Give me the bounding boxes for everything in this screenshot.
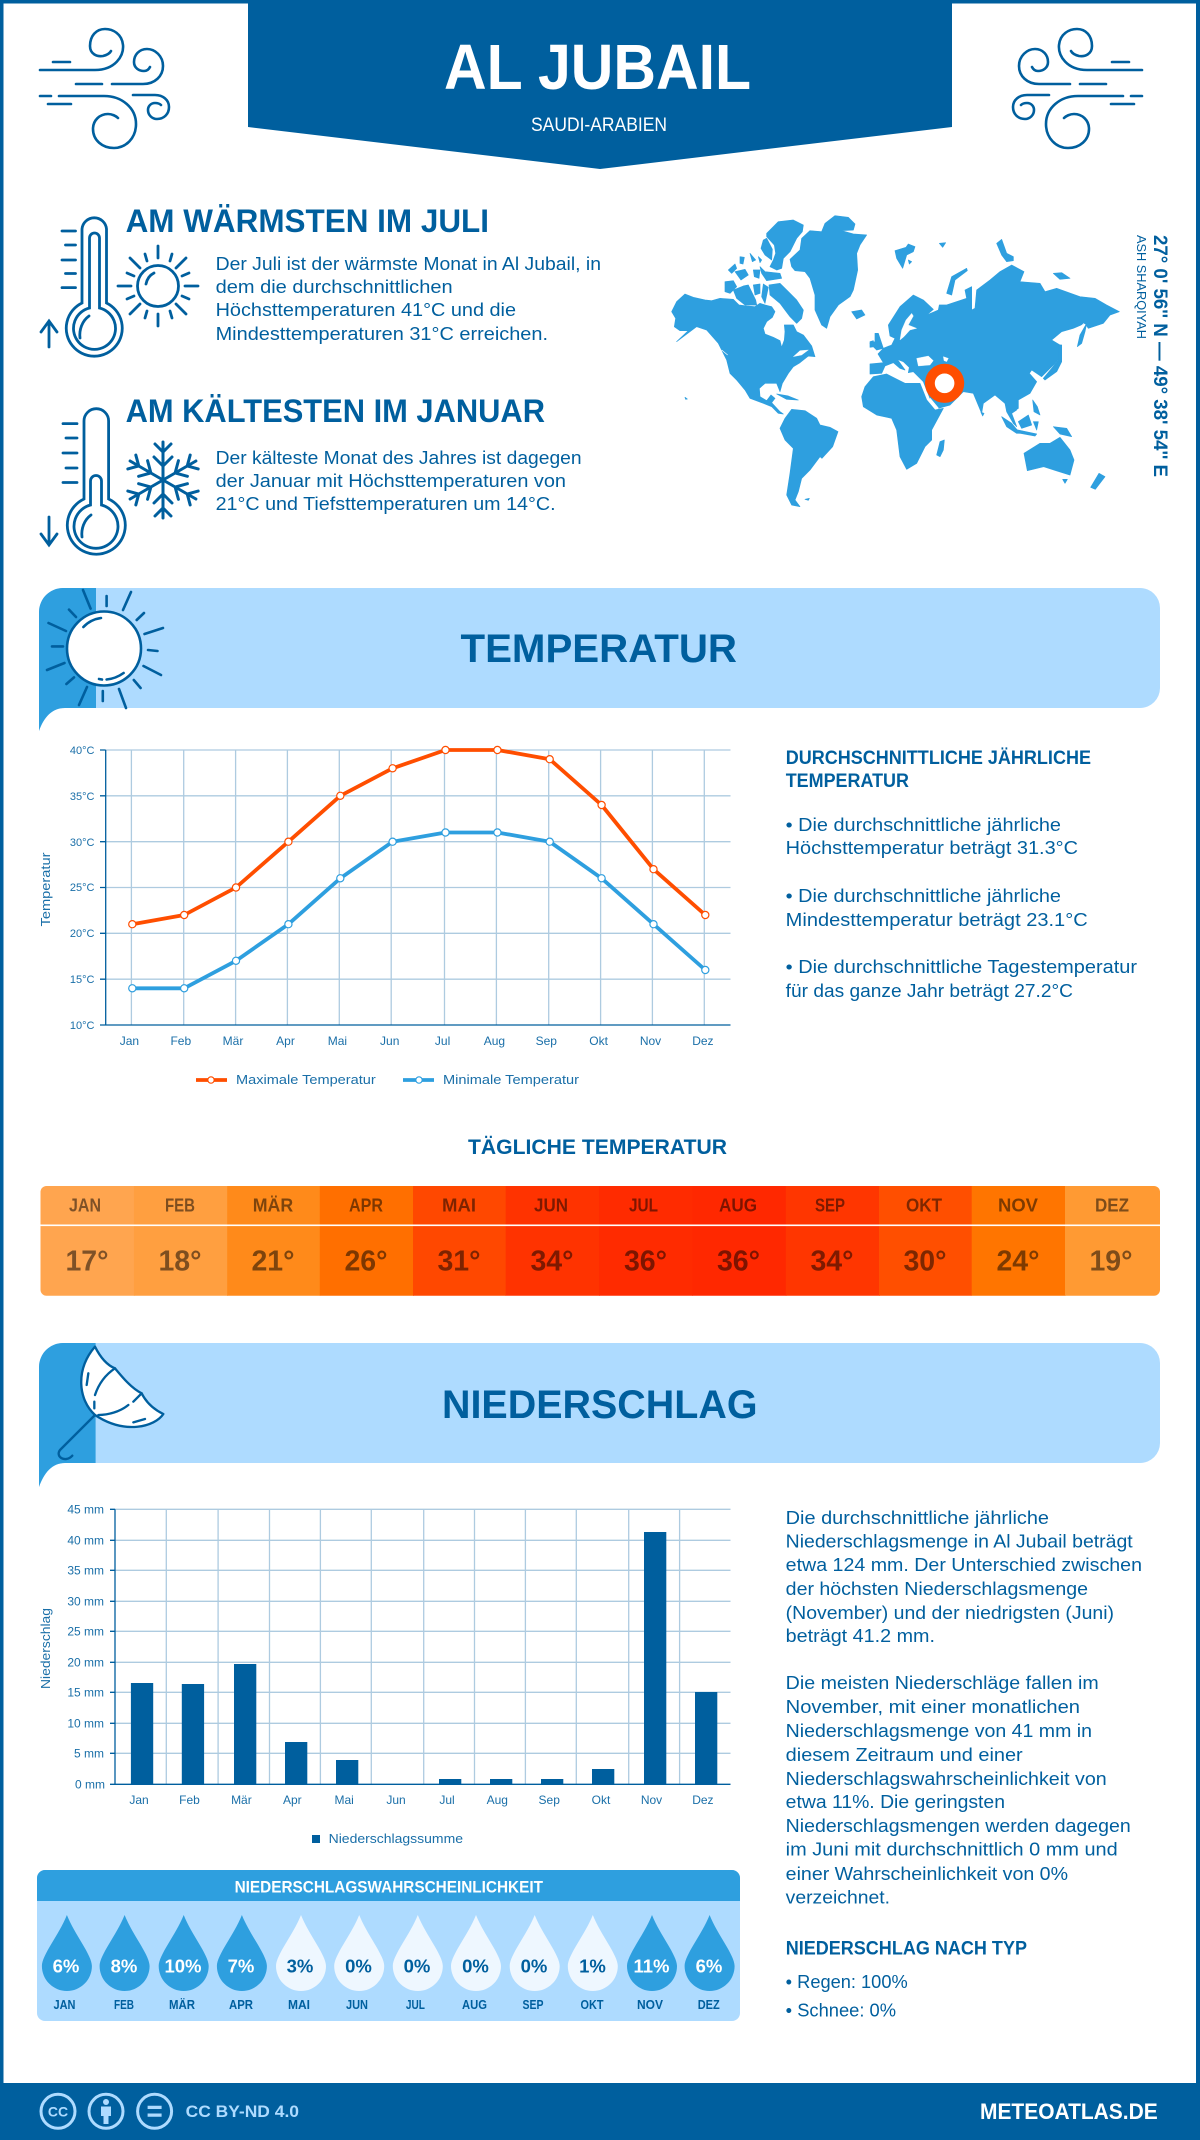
daily values: 26° <box>344 1246 388 1278</box>
text: coldest month: Der kälteste Monat des Jahres ist dagegen <box>216 448 582 468</box>
license text: CC BY-ND 4.0 <box>186 2102 299 2121</box>
daily values: 19° <box>1089 1246 1133 1278</box>
text block: precipitation description: der höchsten Niederschlagsmenge <box>786 1579 1088 1599</box>
legend <box>196 1073 579 1087</box>
world map with location marker <box>672 216 1119 507</box>
region name: ASH SHARQIYAH <box>1134 235 1149 339</box>
bullets: annual temperature: Höchsttemperatur beträgt 31.3°C <box>786 838 1078 858</box>
y axis labels: 40 mm <box>67 1534 104 1548</box>
y axis labels: 5 mm <box>74 1746 104 1760</box>
x axis labels: Feb <box>179 1793 200 1807</box>
text block: precipitation description: Die meisten Niederschläge fallen im <box>786 1673 1099 1693</box>
line chart: temperature <box>39 745 730 1087</box>
probability values: 0% <box>521 1956 547 1977</box>
x axis labels: Sep <box>536 1034 557 1048</box>
legend: Maximale Temperatur <box>236 1073 376 1087</box>
y axis title: Temperatur <box>39 852 53 926</box>
daily values <box>65 1246 1133 1278</box>
daily values: 21° <box>251 1246 295 1278</box>
bullets: annual temperature: • Die durchschnittliche jährliche <box>786 886 1061 906</box>
month labels: SEP <box>815 1196 845 1216</box>
icon: wind right <box>1013 29 1142 148</box>
x axis labels: Apr <box>276 1034 295 1048</box>
bullets: precipitation by type <box>786 1972 908 2021</box>
probability values: 6% <box>53 1956 79 1977</box>
month labels: JUN <box>346 1997 368 2012</box>
probability values: 8% <box>111 1956 137 1977</box>
daily values: 24° <box>996 1246 1040 1278</box>
heading: daily temperature: TÄGLICHE TEMPERATUR <box>468 1136 727 1159</box>
text: warmest month: dem die durchschnittlichen <box>216 277 453 297</box>
daily values: 34° <box>530 1246 574 1278</box>
daily values: 36° <box>624 1246 667 1278</box>
series: minimum temperature <box>129 829 709 992</box>
heading: annual temperature: DURCHSCHNITTLICHE JÄHRLICHE <box>786 748 1091 769</box>
x axis labels: Sep <box>539 1793 560 1807</box>
x axis labels: Nov <box>640 1034 661 1048</box>
month labels: JAN <box>54 1997 76 2012</box>
x axis labels: Nov <box>641 1793 662 1807</box>
x axis labels: Aug <box>487 1793 508 1807</box>
daily values: 17° <box>65 1246 109 1278</box>
heading: coldest month: AM KÄLTESTEN IM JANUAR <box>126 393 545 429</box>
x axis labels: Jun <box>386 1793 406 1807</box>
x axis labels <box>129 1793 714 1807</box>
daily values: 18° <box>158 1246 202 1278</box>
x axis labels: Apr <box>283 1793 302 1807</box>
month labels: MAI <box>288 1997 310 2012</box>
text block: precipitation description: Niederschlagsmenge in Al Jubail beträgt <box>786 1532 1133 1552</box>
daily values: 36° <box>717 1246 760 1278</box>
y axis labels: 30°C <box>70 837 95 849</box>
series: maximum temperature <box>129 746 709 928</box>
text block: precipitation description: Die durchschnittliche jährliche <box>786 1508 1049 1528</box>
y axis labels: 10 mm <box>67 1716 104 1730</box>
text block: precipitation description: November, mit einer monatlichen <box>786 1697 1080 1717</box>
location marker <box>930 369 959 398</box>
x axis labels: Jul <box>435 1034 450 1048</box>
x axis labels: Mai <box>328 1034 347 1048</box>
bullets: annual temperature: • Die durchschnittliche Tagestemperatur <box>786 957 1137 977</box>
text block: precipitation description: diesem Zeitraum und einer <box>786 1745 1023 1765</box>
month labels: AUG <box>462 1997 487 2012</box>
probability values: 6% <box>696 1956 722 1977</box>
month labels: JUL <box>629 1196 658 1216</box>
text block: precipitation description: beträgt 41.2 mm. <box>786 1626 935 1646</box>
y axis labels <box>70 745 95 1032</box>
probability values <box>53 1956 722 1977</box>
heading: warmest month: AM WÄRMSTEN IM JULI <box>126 203 489 239</box>
x axis labels: Jan <box>120 1034 139 1048</box>
icon: cold thermometer <box>41 409 125 554</box>
x axis labels: Jul <box>439 1793 455 1807</box>
probability values: 10% <box>164 1956 202 1977</box>
x axis labels: Okt <box>589 1034 609 1048</box>
site name: METEOATLAS.DE <box>980 2099 1158 2124</box>
legend: Niederschlagssumme <box>329 1832 463 1846</box>
x axis labels: Dez <box>692 1034 714 1048</box>
bullets: annual temperature <box>786 815 1137 1001</box>
month labels: JUN <box>534 1196 568 1216</box>
icon: wind left <box>40 29 169 148</box>
probability values: 7% <box>228 1956 254 1977</box>
text: coldest month: der Januar mit Höchsttemperaturen von <box>216 471 566 491</box>
y axis title: Niederschlag <box>39 1608 53 1689</box>
heading: temperature: TEMPERATUR <box>460 627 737 671</box>
y axis labels: 15 mm <box>67 1686 104 1700</box>
text block: precipitation by type <box>786 1939 1027 2021</box>
month labels: APR <box>349 1196 383 1216</box>
probability values: 3% <box>287 1956 313 1977</box>
x axis labels: Jan <box>129 1793 149 1807</box>
month labels: AUG <box>719 1196 757 1216</box>
month labels: FEB <box>114 1997 134 2012</box>
text block: precipitation description: verzeichnet. <box>786 1888 890 1908</box>
text: warmest month <box>216 254 601 344</box>
text block: precipitation description: Niederschlagsmenge von 41 mm in <box>786 1721 1092 1741</box>
icon: creative commons <box>41 2094 75 2128</box>
text block: precipitation description: etwa 124 mm. Der Unterschied zwischen <box>786 1555 1142 1575</box>
probability values: 11% <box>633 1956 670 1977</box>
panel: precipitation header <box>39 1343 1160 1487</box>
heading: annual temperature <box>786 748 1091 792</box>
daily values: 31° <box>437 1246 481 1278</box>
text block: annual temperature <box>786 748 1137 1001</box>
y axis labels: 40°C <box>70 745 95 757</box>
y axis labels: 10°C <box>70 1020 95 1032</box>
title: AL JUBAIL <box>444 31 751 103</box>
text block: precipitation description: Niederschlagswahrscheinlichkeit von <box>786 1769 1107 1789</box>
coordinates: 27° 0' 56'' N — 49° 38' 54'' E <box>1149 235 1170 477</box>
daily values: 30° <box>903 1246 947 1278</box>
bullets: annual temperature: Mindesttemperatur beträgt 23.1°C <box>786 910 1088 930</box>
text: coldest month: 21°C und Tiefsttemperaturen um 14°C. <box>216 494 556 514</box>
daily values: 34° <box>810 1246 854 1278</box>
month labels: APR <box>229 1997 254 2012</box>
heading: precipitation by type: NIEDERSCHLAG NACH TYP <box>786 1939 1027 1960</box>
bullets: precipitation by type: • Regen: 100% <box>786 1972 908 1992</box>
icon: sun <box>118 246 198 326</box>
month labels: JAN <box>69 1196 101 1216</box>
text: warmest month: Der Juli ist der wärmste Monat in Al Jubail, in <box>216 254 601 274</box>
table: daily temperature <box>40 1186 1160 1296</box>
text: coldest month <box>216 448 582 514</box>
x axis labels: Mai <box>335 1793 354 1807</box>
x axis labels: Mär <box>231 1793 252 1807</box>
text block: precipitation description <box>786 1508 1142 1908</box>
y axis labels: 20 mm <box>67 1656 104 1670</box>
x axis labels: Aug <box>484 1034 505 1048</box>
month labels <box>54 1997 720 2012</box>
panel title: NIEDERSCHLAGSWAHRSCHEINLICHKEIT <box>235 1878 544 1897</box>
coordinates <box>1134 235 1170 477</box>
month labels: MÄR <box>169 1997 196 2012</box>
text block: precipitation description: (November) und der niedrigsten (Juni) <box>786 1603 1114 1623</box>
y axis labels: 35 mm <box>67 1564 104 1578</box>
icon: umbrella <box>59 1347 163 1459</box>
drops <box>42 1915 735 1991</box>
y axis labels: 25°C <box>70 882 95 894</box>
probability values: 0% <box>404 1956 430 1977</box>
probability values: 1% <box>579 1956 606 1977</box>
title banner <box>248 0 952 169</box>
text block: precipitation description: im Juni mit durchschnittlich 0 mm und <box>786 1840 1118 1860</box>
icon: no derivatives <box>138 2094 172 2128</box>
month labels: DEZ <box>698 1997 720 2012</box>
bars <box>131 1532 717 1784</box>
footer <box>0 2083 1200 2140</box>
month labels: DEZ <box>1095 1196 1129 1216</box>
icon: hot thermometer <box>41 218 122 356</box>
text block: precipitation description: etwa 11%. Die geringsten <box>786 1792 1005 1812</box>
month labels: MAI <box>442 1196 476 1216</box>
y axis labels: 30 mm <box>67 1594 104 1608</box>
icon: creative commons: CC <box>48 2104 68 2120</box>
text: warmest month: Höchsttemperaturen 41°C und die <box>216 300 516 320</box>
bullets: precipitation by type: • Schnee: 0% <box>786 2001 896 2021</box>
y axis labels: 20°C <box>70 928 95 940</box>
text block: precipitation description: Niederschlagsmengen werden dagegen <box>786 1816 1131 1836</box>
y axis labels: 25 mm <box>67 1624 104 1638</box>
bullets: annual temperature: • Die durchschnittliche jährliche <box>786 815 1061 835</box>
probability values: 0% <box>345 1956 372 1977</box>
x axis labels: Okt <box>592 1793 611 1807</box>
legend: Minimale Temperatur <box>443 1073 579 1087</box>
icon: snowflake <box>126 442 200 518</box>
y axis labels: 35°C <box>70 791 95 803</box>
text block: precipitation description: einer Wahrscheinlichkeit von 0% <box>786 1864 1068 1884</box>
y axis labels: 45 mm <box>67 1502 104 1516</box>
heading: precipitation: NIEDERSCHLAG <box>442 1383 758 1427</box>
x axis labels: Mär <box>223 1034 243 1048</box>
icon: attribution <box>89 2094 123 2128</box>
month labels: NOV <box>637 1997 663 2012</box>
y axis labels: 0 mm <box>75 1778 105 1792</box>
x axis labels: Dez <box>692 1793 714 1807</box>
heading: annual temperature: TEMPERATUR <box>786 771 909 792</box>
probability values: 0% <box>462 1956 489 1977</box>
panel: precipitation probability <box>37 1870 740 2021</box>
month labels: OKT <box>580 1997 604 2012</box>
bar chart: precipitation <box>39 1502 730 1846</box>
x axis labels <box>120 1034 714 1048</box>
panel: temperature header <box>39 588 1160 731</box>
month labels: JUL <box>406 1997 425 2012</box>
x axis labels: Feb <box>170 1034 191 1048</box>
subtitle: country: SAUDI-ARABIEN <box>531 115 667 136</box>
month labels <box>69 1196 1129 1216</box>
month labels: OKT <box>906 1196 942 1216</box>
bullets: annual temperature: für das ganze Jahr beträgt 27.2°C <box>786 981 1073 1001</box>
y axis labels <box>67 1502 105 1792</box>
x axis labels: Jun <box>380 1034 399 1048</box>
y axis labels: 15°C <box>70 974 95 986</box>
month labels: FEB <box>165 1196 195 1216</box>
icon: sun <box>47 590 163 708</box>
text: warmest month: Mindesttemperaturen 31°C erreichen. <box>216 324 548 344</box>
month labels: SEP <box>522 1997 544 2012</box>
month labels: NOV <box>998 1196 1038 1216</box>
month labels: MÄR <box>253 1196 293 1216</box>
